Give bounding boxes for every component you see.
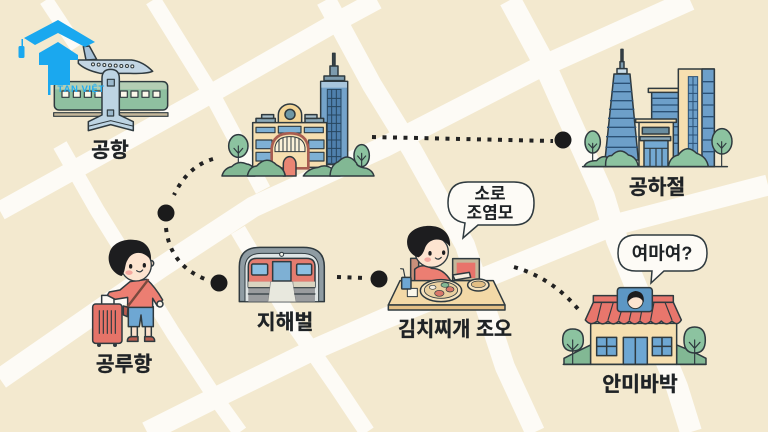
side plate (468, 279, 489, 291)
speech bubble: guesthouse: 여마여? (632, 244, 692, 264)
sign with face (617, 288, 652, 312)
route: dotted path building to stop (372, 137, 553, 141)
icon: station building with tower (222, 53, 374, 176)
icon: traveler with suitcase (93, 240, 163, 347)
speech bubble: diner: 소로 (474, 184, 506, 204)
route: dotted path subway to restaurant (337, 277, 366, 278)
label: airport: 공항 (91, 139, 129, 162)
pizza (420, 280, 462, 302)
picture frame (453, 259, 479, 281)
label: traveler: 공루항 (96, 353, 152, 376)
route: dotted path to subway (166, 228, 205, 279)
head (407, 226, 450, 267)
awning (585, 296, 681, 324)
icon: subway station (239, 247, 324, 302)
plane: top view (88, 69, 133, 131)
table (388, 281, 505, 310)
logo: Tan Viet graduation cap: TÂN VIỆT (57, 83, 105, 95)
label: district: 공하절 (629, 176, 685, 199)
main building (253, 104, 327, 176)
train (54, 82, 168, 116)
back building (648, 88, 680, 167)
icon: airport train and planes (54, 46, 168, 131)
speech bubble: diner (448, 182, 534, 238)
logo: Tan Viet graduation cap (18, 20, 105, 95)
trees and shrubs (563, 327, 706, 364)
route: dotted path restaurant to guesthouse (514, 267, 578, 309)
route stop dots (158, 132, 572, 292)
drink and napkin (401, 269, 417, 297)
label: guesthouse: 안미바박 (602, 373, 678, 396)
low entrance building (636, 119, 676, 167)
speech bubble: diner: 조염모 (467, 204, 513, 222)
trees and bushes (222, 135, 374, 176)
tower (321, 53, 348, 165)
suitcase (93, 295, 122, 347)
tapered tower (605, 49, 638, 160)
speech bubble: guesthouse (618, 235, 707, 283)
label: kimchi stew: 김치찌개 조오 (398, 318, 512, 341)
chair and shirt (411, 258, 471, 282)
icon: diner eating at table (388, 226, 505, 310)
label: subway: 지해벌 (257, 311, 313, 334)
tall building (678, 69, 714, 167)
icon: skyscraper district (583, 49, 732, 167)
trees and bushes (583, 129, 732, 167)
route: dotted path to city hall (174, 159, 213, 195)
shop building (563, 323, 706, 364)
legs (127, 307, 155, 341)
icon: guesthouse shop (563, 288, 706, 364)
torso and arms (107, 279, 163, 317)
head (109, 240, 154, 281)
plane: side view (78, 46, 153, 73)
